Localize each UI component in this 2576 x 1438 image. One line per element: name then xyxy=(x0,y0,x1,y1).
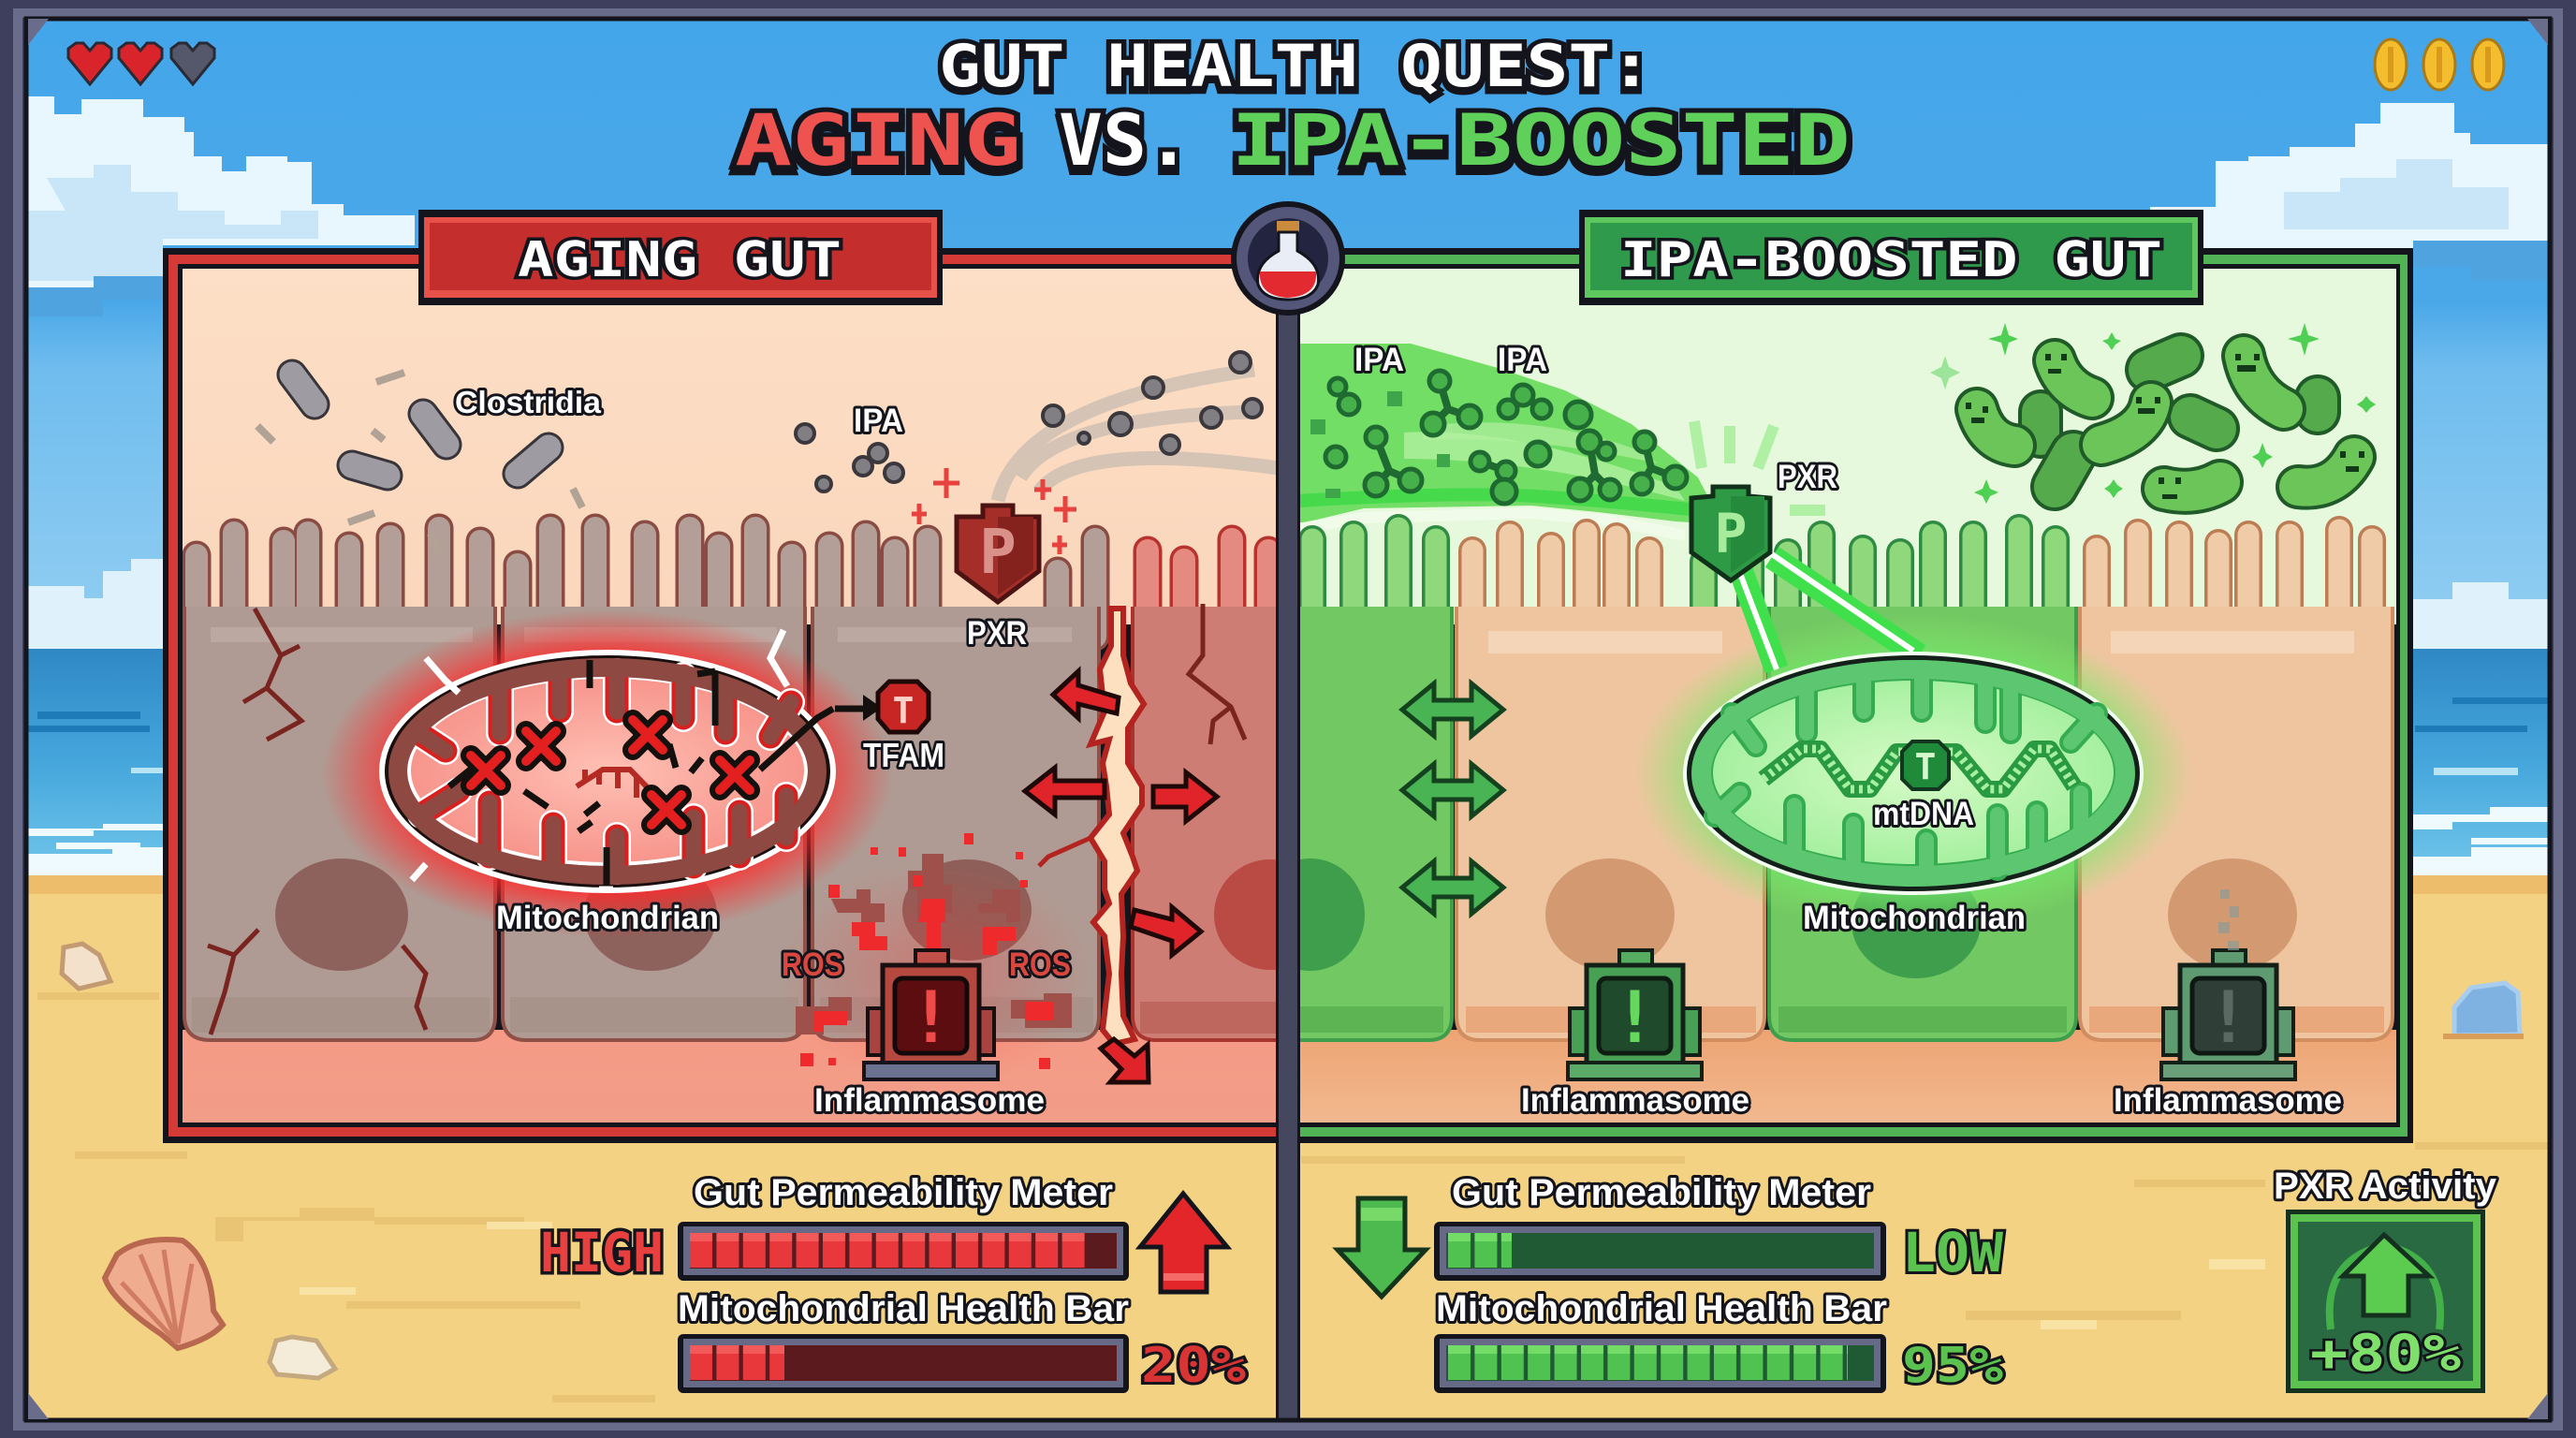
red glow: tissue xyxy=(322,609,893,937)
label: PXR (boosted): PXR xyxy=(1778,459,1837,495)
mitochondrial cracks xyxy=(449,660,833,885)
icon: inflammasome (quiet green) xyxy=(1568,950,1702,1079)
molecules: gray IPA xyxy=(796,352,1262,492)
icons: hearts xyxy=(68,43,214,84)
label: Mitochondrion (boosted): Mitochondrian xyxy=(1803,900,2026,936)
clouds: right xyxy=(2150,103,2548,649)
bacteria: healthy green xyxy=(1966,354,2364,499)
villi: aging xyxy=(197,528,1268,637)
banner: IPA-BOOSTED GUT xyxy=(1579,210,2203,305)
label: IPA 1: IPA xyxy=(1354,342,1404,378)
panel: IPA-boosted gut xyxy=(1256,248,2413,1143)
sea xyxy=(28,649,2548,875)
label: gut permeability (aging): Gut Permeability Meter xyxy=(694,1172,1113,1213)
basal zone xyxy=(183,1030,1279,1123)
label: Mitochondrion (aging): Mitochondrian xyxy=(496,900,719,936)
label: mitochondrial health (boosted): Mitochondrial Health Bar xyxy=(1436,1288,1887,1329)
lightning sparks xyxy=(412,630,787,889)
beams: PXR to mitochondrion xyxy=(1739,552,1919,669)
icon: small shell on sand xyxy=(62,944,110,989)
cells: boosted xyxy=(1297,607,2393,1040)
bacteria with faces xyxy=(1977,356,2354,492)
bacteria faces xyxy=(1966,354,2364,499)
mtDNA helix xyxy=(1764,749,2074,789)
icon: blue shell xyxy=(2443,983,2524,1039)
title line 2 xyxy=(735,98,1851,182)
value: 95%: 95% xyxy=(1902,1338,2003,1394)
cell highlights and lower bands xyxy=(192,627,1281,1034)
icon: PXR shield (dim): P xyxy=(979,516,1017,588)
label: gut permeability (boosted): Gut Permeability Meter xyxy=(1452,1172,1871,1213)
icon: PXR shield (active): P xyxy=(1715,502,1747,565)
double arrows: tight junctions xyxy=(1402,683,1503,914)
damage X marks xyxy=(471,720,750,825)
icons: coins xyxy=(2375,39,2504,90)
label: ROS left: ROS xyxy=(782,946,843,983)
cell cracks xyxy=(208,604,1245,1034)
callout: PXR activity box: +80% xyxy=(2310,1324,2462,1383)
title line 2: VS. xyxy=(1059,98,1191,182)
sparkles: red xyxy=(912,468,1076,554)
icon: inflammasome (inactive): ! xyxy=(2207,976,2249,1059)
bar: mitochondrial health 95% xyxy=(1434,1334,1886,1393)
icon: shell, large scallop xyxy=(105,1240,223,1348)
icon: PXR shield (active) xyxy=(1691,487,1770,580)
meter group: boosted xyxy=(1338,1172,2003,1394)
banner: AGING GUT: AGING GUT xyxy=(518,232,842,288)
icon: inflammasome (inactive) xyxy=(2161,950,2295,1079)
label: TFAM: TFAM xyxy=(863,736,944,774)
arrow: mitochondrion to TFAM xyxy=(835,695,882,721)
icon: T marker xyxy=(1902,741,1949,789)
bar: gut permeability LOW xyxy=(1434,1222,1886,1281)
stream specks xyxy=(1310,391,1450,498)
sparkles: green xyxy=(1930,323,2376,504)
label: IPA 2: IPA xyxy=(1498,342,1547,378)
IPA stream xyxy=(1297,344,1722,536)
lumen debris stream xyxy=(998,370,1279,501)
icon: inflammasome (quiet green): ! xyxy=(1614,976,1656,1059)
label: ROS right: ROS xyxy=(1009,946,1071,983)
icon: inflammasome (active red): ! xyxy=(910,976,952,1059)
meter group: aging xyxy=(540,1172,1246,1394)
value: 20%: 20% xyxy=(1141,1338,1246,1394)
badge: potion flask xyxy=(1231,201,1345,315)
basal zone xyxy=(1297,1030,2396,1123)
callout: PXR activity box xyxy=(2286,1210,2485,1393)
arrow: up red xyxy=(1140,1194,1227,1292)
banner: IPA-BOOSTED GUT: IPA-BOOSTED GUT xyxy=(1620,232,2162,288)
label: PXR Activity: PXR Activity xyxy=(2274,1166,2497,1207)
title line 2: AGING xyxy=(735,98,1021,182)
label: mtDNA: mtDNA xyxy=(1873,796,1974,832)
icon: small stone xyxy=(270,1337,335,1378)
mitochondrion: healthy xyxy=(1683,652,2144,895)
shield rays xyxy=(1694,421,1825,510)
icon: TFAM badge: T xyxy=(893,690,914,731)
label: Inflammasome (boosted 1): Inflammasome xyxy=(1521,1082,1749,1119)
icon: TFAM badge xyxy=(878,682,929,732)
icon: PXR shield (dim) xyxy=(957,506,1039,602)
nuclei: boosted xyxy=(1256,858,2297,978)
value: LOW: LOW xyxy=(1902,1221,2003,1284)
smoke puffs xyxy=(2218,889,2239,950)
clouds: left xyxy=(28,96,415,649)
label: Inflammasome (aging): Inflammasome xyxy=(814,1082,1045,1119)
bar: mitochondrial health 20% xyxy=(678,1334,1129,1393)
mitochondrion: damaged xyxy=(379,630,836,893)
bacterium lobes behind xyxy=(2041,356,2318,487)
label: IPA (aging): IPA xyxy=(854,403,903,439)
label: Clostridia: Clostridia xyxy=(455,385,602,419)
title line 1: GUT HEALTH QUEST: xyxy=(939,32,1652,100)
label: mitochondrial health (aging): Mitochondrial Health Bar xyxy=(678,1288,1129,1329)
value: HIGH: HIGH xyxy=(540,1221,664,1284)
bacteria: clostridia (gray) xyxy=(257,373,582,552)
molecules: green IPA xyxy=(1325,371,1687,504)
barrier crack xyxy=(1039,609,1144,1044)
label: Inflammasome (boosted 2): Inflammasome xyxy=(2114,1082,2342,1119)
title line 2: IPA-BOOSTED xyxy=(1231,98,1851,182)
icon: T marker: T xyxy=(1915,746,1936,787)
title xyxy=(735,32,1851,182)
villi: boosted xyxy=(1300,514,2386,607)
damaged DNA xyxy=(577,770,666,807)
sand xyxy=(28,875,2548,1418)
panel: aging gut xyxy=(163,248,1326,1143)
center divider xyxy=(1276,309,1300,1418)
ROS burst xyxy=(796,833,1072,1069)
permeability arrows: aging xyxy=(1025,671,1217,1082)
cell highlights and lower bands xyxy=(1297,631,2384,1033)
arrow: down green xyxy=(1338,1198,1426,1297)
nuclei: aging xyxy=(275,858,1326,971)
bar: gut permeability HIGH xyxy=(678,1222,1129,1281)
cells: aging xyxy=(184,607,1287,1040)
label: PXR (aging): PXR xyxy=(967,615,1027,652)
icon: inflammasome (active red) xyxy=(864,950,998,1079)
banner: AGING GUT xyxy=(418,210,943,305)
